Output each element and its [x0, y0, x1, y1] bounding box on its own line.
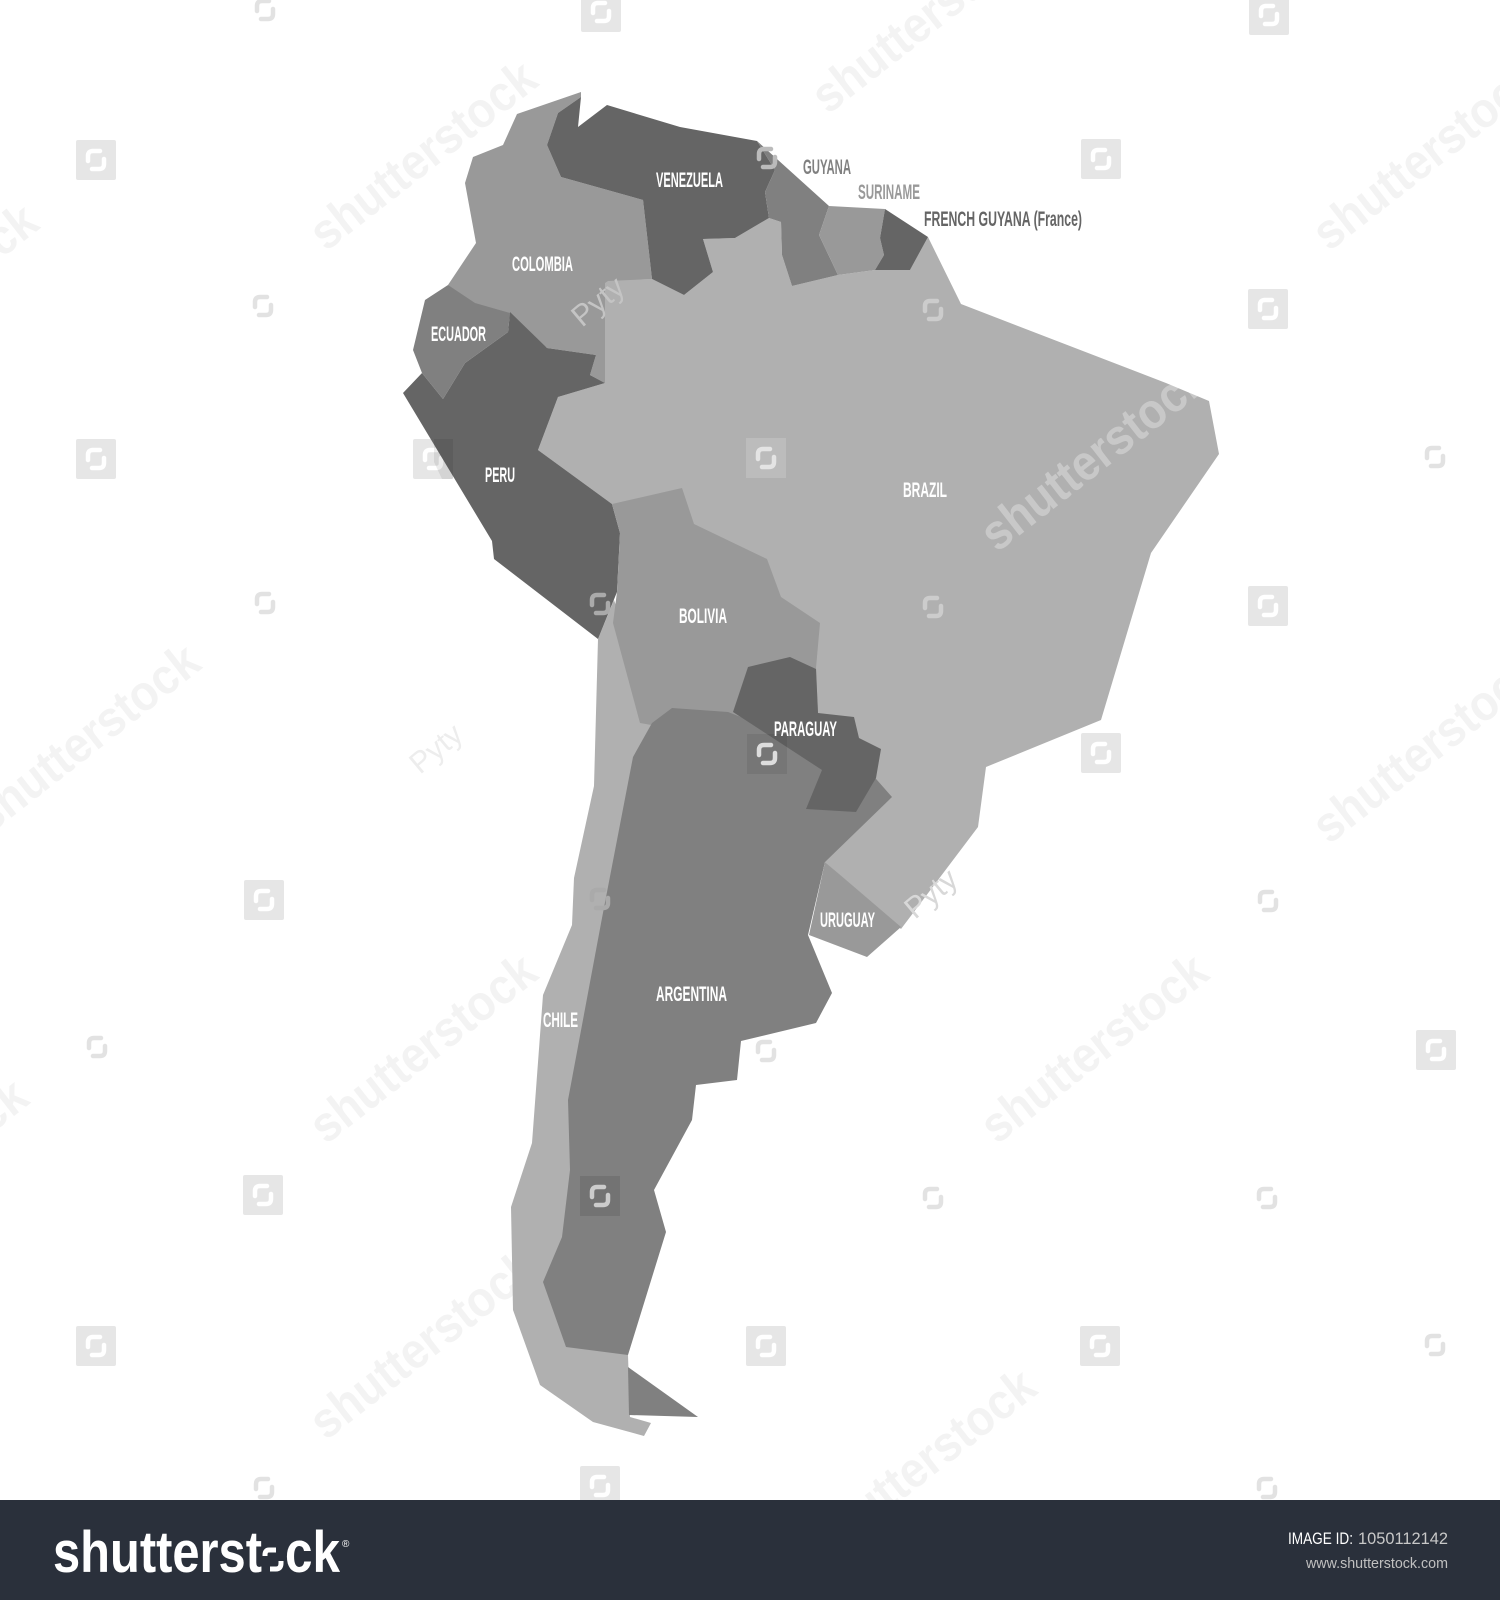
country labels [431, 156, 1082, 1032]
footer image id: IMAGE ID: [1288, 1530, 1353, 1548]
footer image id: 1050112142 [1358, 1530, 1448, 1548]
country: Venezuela [547, 97, 775, 295]
country: Tierra del Fuego (Argentina) [628, 1367, 698, 1417]
country labels: COLOMBIA [512, 253, 573, 276]
country: Paraguay [733, 657, 881, 812]
country labels: ECUADOR [431, 323, 486, 346]
footer image id [1288, 1530, 1448, 1548]
country: Brazil [538, 218, 1219, 929]
watermark on white background: shutterstock [298, 1238, 547, 1450]
country: Peru [403, 312, 620, 639]
map of South America [403, 92, 1219, 1436]
footer bar [0, 1500, 1500, 1600]
country labels: PARAGUAY [774, 718, 837, 741]
country: Guyana [757, 141, 838, 286]
watermark on white background: shutterstock [969, 942, 1218, 1154]
footer website: www.shutterstock.com [1305, 1555, 1448, 1572]
footer logo: ck [285, 1520, 341, 1585]
country: Chile [511, 600, 660, 1436]
country labels: FRENCH GUYANA (France) [924, 208, 1082, 231]
country labels: GUYANA [803, 156, 851, 179]
country: Bolivia [612, 488, 820, 730]
country: Argentina [543, 708, 892, 1355]
footer logo: shutterst [53, 1520, 262, 1585]
footer logo: ® [342, 1539, 350, 1550]
country labels: ARGENTINA [656, 983, 727, 1006]
country labels: BOLIVIA [679, 605, 727, 628]
country: Ecuador [413, 285, 510, 399]
country: Uruguay [809, 862, 901, 957]
watermark on white background: shutterstock [298, 49, 547, 261]
country labels: CHILE [543, 1009, 578, 1032]
country: Suriname [819, 206, 885, 275]
country labels: PERU [485, 464, 515, 487]
country labels: BRAZIL [903, 479, 947, 502]
watermark on white background: shutterstock [298, 942, 547, 1154]
watermark over map: shutterstock [969, 350, 1218, 562]
country labels: VENEZUELA [656, 169, 723, 192]
country: French Guyana [875, 209, 928, 270]
watermark over map: Pyty [898, 863, 964, 925]
watermark over map: Pyty [565, 271, 631, 333]
watermark on white background: Pyty [403, 718, 469, 780]
country: Colombia [448, 92, 652, 383]
country labels: URUGUAY [820, 909, 875, 932]
country labels: SURINAME [858, 181, 920, 204]
watermark on white background: shutterstock [797, 1357, 1046, 1569]
watermark over map [434, 149, 1218, 1216]
